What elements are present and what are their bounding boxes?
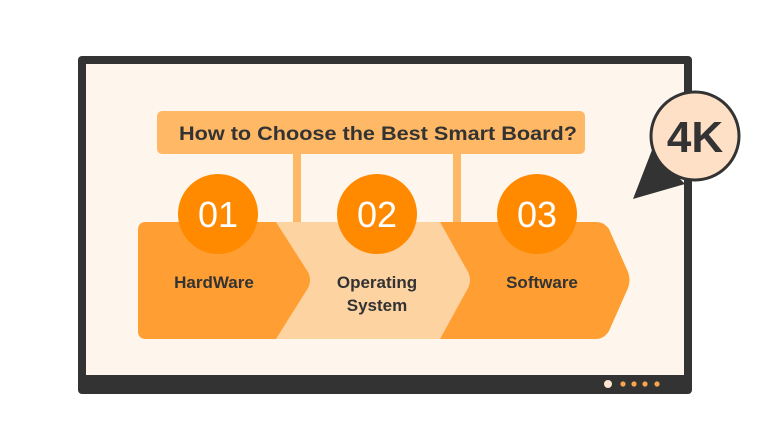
step 3 chevron: Software: Software (506, 273, 578, 292)
number circles: 01 (198, 194, 238, 235)
connectors (293, 154, 461, 224)
number circles: 02 (357, 194, 397, 235)
title box (157, 111, 585, 154)
step 2 chevron: Operating System (270, 222, 470, 339)
number circles: 03 (517, 194, 557, 235)
step 1 chevron: HardWare (138, 222, 310, 339)
step 1 chevron: HardWare: HardWare (174, 273, 254, 292)
board frame (78, 56, 692, 394)
4K badge (633, 92, 739, 199)
title box: How to Choose the Best Smart Board? (179, 124, 577, 145)
step 3 chevron: Software (430, 222, 630, 339)
number circles (178, 174, 577, 254)
step 2 chevron: Operating System: Operating (337, 273, 417, 292)
step 2 chevron: Operating System: System (347, 296, 407, 315)
4K badge: 4K (667, 113, 723, 162)
indicator dots (604, 380, 660, 388)
